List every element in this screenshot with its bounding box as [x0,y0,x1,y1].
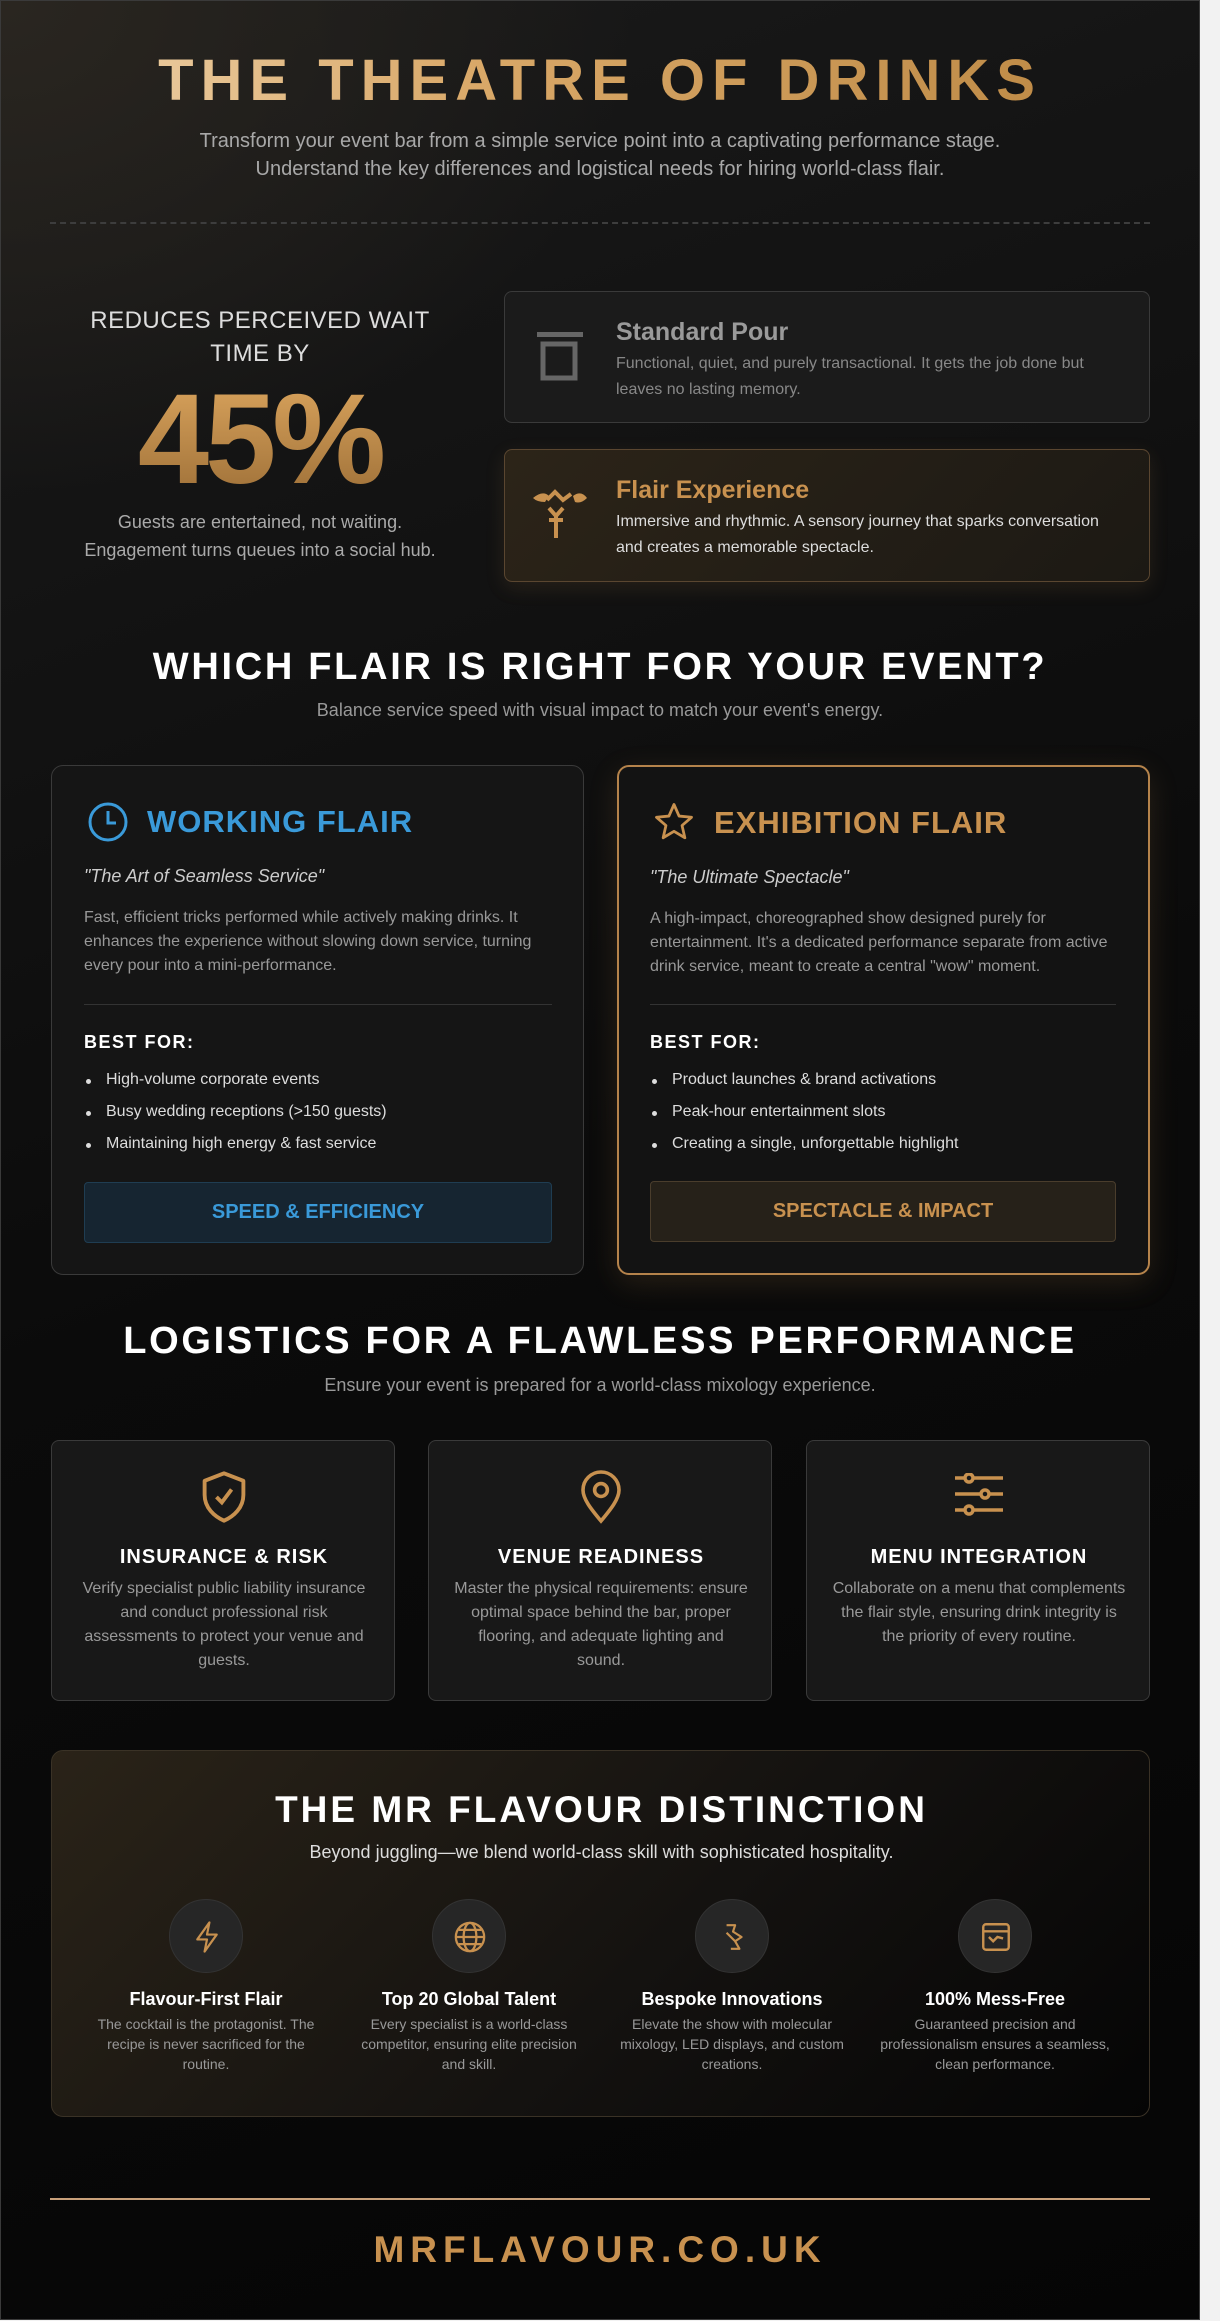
panel: exhibition flair [617,765,1150,1275]
subheading: Ensure your event is prepared for a world-class mixology experience. [324,1375,876,1395]
stat caption: Engagement turns queues into a social hub. [84,540,436,560]
stat label [90,307,430,367]
item: mess-free [880,1899,1110,2072]
heading: WORKING FLAIR [147,804,413,839]
footer: website: MRFLAVOUR.CO.UK [373,2229,827,2270]
badge: SPEED & EFFICIENCY [212,1201,424,1223]
badge [84,1182,552,1243]
best for list: Busy wedding receptions (>150 guests) [106,1103,387,1120]
text: Immersive and rhythmic. A sensory journey that sparks conversation and creates a memorable spectacle. [616,513,1099,556]
best for list [650,1032,958,1152]
item: top 20: Top 20 Global Talent [382,1989,556,2009]
item: bespoke: Elevate the show with molecular mixology, LED displays, and custom creations. [620,2016,844,2072]
best for list [84,1032,387,1152]
badge [650,1181,1116,1242]
text: Collaborate on a menu that complements the flair style, ensuring drink integrity is the priority of every routine. [833,1580,1125,1645]
best for list: Creating a single, unforgettable highlight [672,1135,958,1152]
stat number: 45% [138,368,382,511]
panel: insurance [51,1440,395,1701]
icon: star [655,803,693,840]
description: Fast, efficient tricks performed while actively making drinks. It enhances the experience without slowing down service, turning every pour into a mini-performance. [84,909,531,974]
badge: SPECTACLE & IMPACT [773,1200,993,1222]
text: INSURANCE & RISK [120,1546,328,1568]
heading: EXHIBITION FLAIR [714,805,1007,840]
icon: shield [202,1471,246,1523]
item: flavour-first: The cocktail is the protagonist. The recipe is never sacrificed for the routine. [98,2016,314,2072]
stat caption [84,512,436,560]
stat label: REDUCES PERCEIVED WAIT [90,307,430,334]
heading: THE MR FLAVOUR DISTINCTION [275,1789,928,1830]
subtitle: Transform your event bar from a simple service point into a captivating performance stage. [200,130,1000,152]
item: bespoke [620,1899,844,2072]
panel: menu [806,1440,1150,1701]
icon: lightning [169,1899,243,1973]
stat block [84,307,436,560]
description: A high-impact, choreographed show designed purely for entertainment. It's a dedicated performance separate from active drink service, meant to create a central "wow" moment. [650,910,1108,975]
panel: venue [428,1440,772,1701]
text: Flair Experience [616,476,809,504]
heading: logistics: LOGISTICS FOR A FLAWLESS PERFORMANCE [123,1320,1077,1362]
item: mess-free: Guaranteed precision and professionalism ensures a seamless, clean performance. [880,2016,1110,2072]
icon: glass [537,332,583,380]
quote: "The Art of Seamless Service" [84,866,324,886]
subtitle: Understand the key differences and logistical needs for hiring world-class flair. [256,158,944,180]
text: MENU INTEGRATION [871,1546,1087,1568]
best for list: Maintaining high energy & fast service [106,1135,376,1152]
best for list: BEST FOR: [650,1032,760,1052]
panel: standard pour [504,291,1150,423]
icon: sliders [955,1473,1003,1516]
icon: box [958,1899,1032,1973]
quote: "The Ultimate Spectacle" [650,867,849,887]
best for list: BEST FOR: [84,1032,194,1052]
panel: flair experience [504,449,1150,582]
stat caption: Guests are entertained, not waiting. [118,512,402,532]
best for list: Product launches & brand activations [672,1071,936,1088]
text: Verify specialist public liability insurance and conduct professional risk assessments to protect your venue and guests. [83,1580,365,1669]
text [616,476,1099,556]
text: Standard Pour [616,318,788,346]
icon: map pin [581,1470,621,1524]
item: flavour-first [98,1899,314,2072]
best for list: Peak-hour entertainment slots [672,1103,885,1120]
item: top 20 [361,1899,577,2072]
subheading: Beyond juggling—we blend world-class skill with sophisticated hospitality. [310,1842,893,1862]
icon: molecule [695,1899,769,1973]
stat label: TIME BY [210,340,310,367]
item: flavour-first: Flavour-First Flair [129,1989,283,2009]
subtitle [200,130,1000,180]
text [833,1546,1125,1645]
panel: distinction [51,1750,1150,2117]
heading: which flair: WHICH FLAIR IS RIGHT FOR YOUR EVENT? [153,646,1047,688]
text: Master the physical requirements: ensure optimal space behind the bar, proper flooring, and adequate lighting and sound. [454,1580,748,1669]
stat number [60,380,460,500]
subheading: Balance service speed with visual impact to match your event's energy. [317,700,883,720]
icon: globe [432,1899,506,1973]
best for list: High-volume corporate events [106,1071,319,1088]
icon: clock [88,802,128,842]
text: VENUE READINESS [498,1546,704,1568]
item: bespoke: Bespoke Innovations [641,1989,823,2009]
item: mess-free: 100% Mess-Free [925,1989,1065,2009]
text: Functional, quiet, and purely transactional. It gets the job done but leaves no lasting memory. [616,355,1084,398]
title: THE THEATRE OF DRINKS [158,48,1042,113]
icon: juggling bottles [533,489,587,538]
item: top 20: Every specialist is a world-class competitor, ensuring elite precision and skill. [361,2016,577,2072]
panel: working flair [51,765,584,1275]
text [616,318,1084,398]
